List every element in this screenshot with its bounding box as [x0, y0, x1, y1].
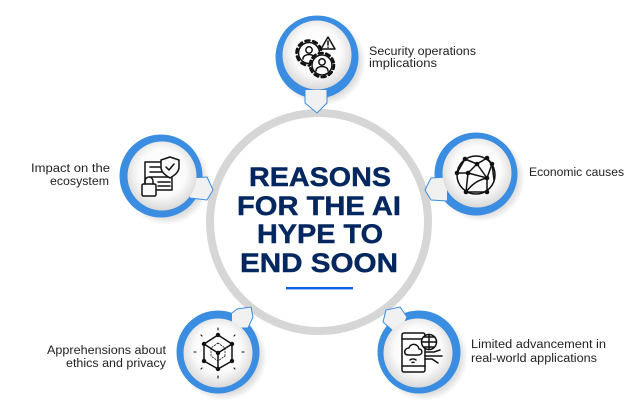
label: real-world applications: Limited advancement in: [471, 339, 606, 351]
node: security operations: [276, 16, 366, 113]
connector tab: [425, 177, 447, 201]
label: ecosystem impact: [31, 163, 110, 188]
connector tab: [305, 90, 327, 113]
label: ecosystem impact: Impact on the: [31, 163, 110, 175]
icon: phone with cloud and globe: [402, 333, 442, 372]
title: [237, 162, 401, 278]
central ring: [210, 113, 428, 331]
label: ethics and privacy: Apprehensions about: [47, 345, 167, 357]
title: REASONS: [249, 162, 391, 192]
label: security operations: [369, 46, 476, 70]
label: real-world applications: [471, 339, 606, 365]
label: ethics and privacy: ethics and privacy: [66, 358, 166, 370]
label: real-world applications: real-world applications: [471, 353, 597, 365]
connector tab: [190, 177, 213, 200]
title: END SOON: [240, 248, 398, 278]
icon: cube: [194, 328, 244, 378]
icon: network globe: [455, 156, 495, 194]
node: ethics and privacy: [176, 307, 267, 401]
connector tab: [232, 307, 253, 328]
connector tab: [383, 307, 407, 330]
title: FOR THE AI: [237, 191, 401, 221]
label: economic causes: Economic causes: [529, 167, 624, 179]
node: economic causes: [425, 132, 525, 222]
label: security operations: implications: [369, 58, 437, 70]
node: ecosystem impact: [120, 134, 213, 225]
label: ecosystem impact: ecosystem: [50, 176, 109, 188]
icon: document with shield and lock: [142, 157, 179, 196]
node: real-world applications: [378, 307, 468, 401]
label: security operations: Security operations: [369, 46, 476, 58]
icon: gears with people and warning: [296, 37, 335, 77]
label: ethics and privacy: [47, 345, 167, 370]
title underline: [286, 287, 353, 289]
title: HYPE TO: [257, 219, 383, 249]
